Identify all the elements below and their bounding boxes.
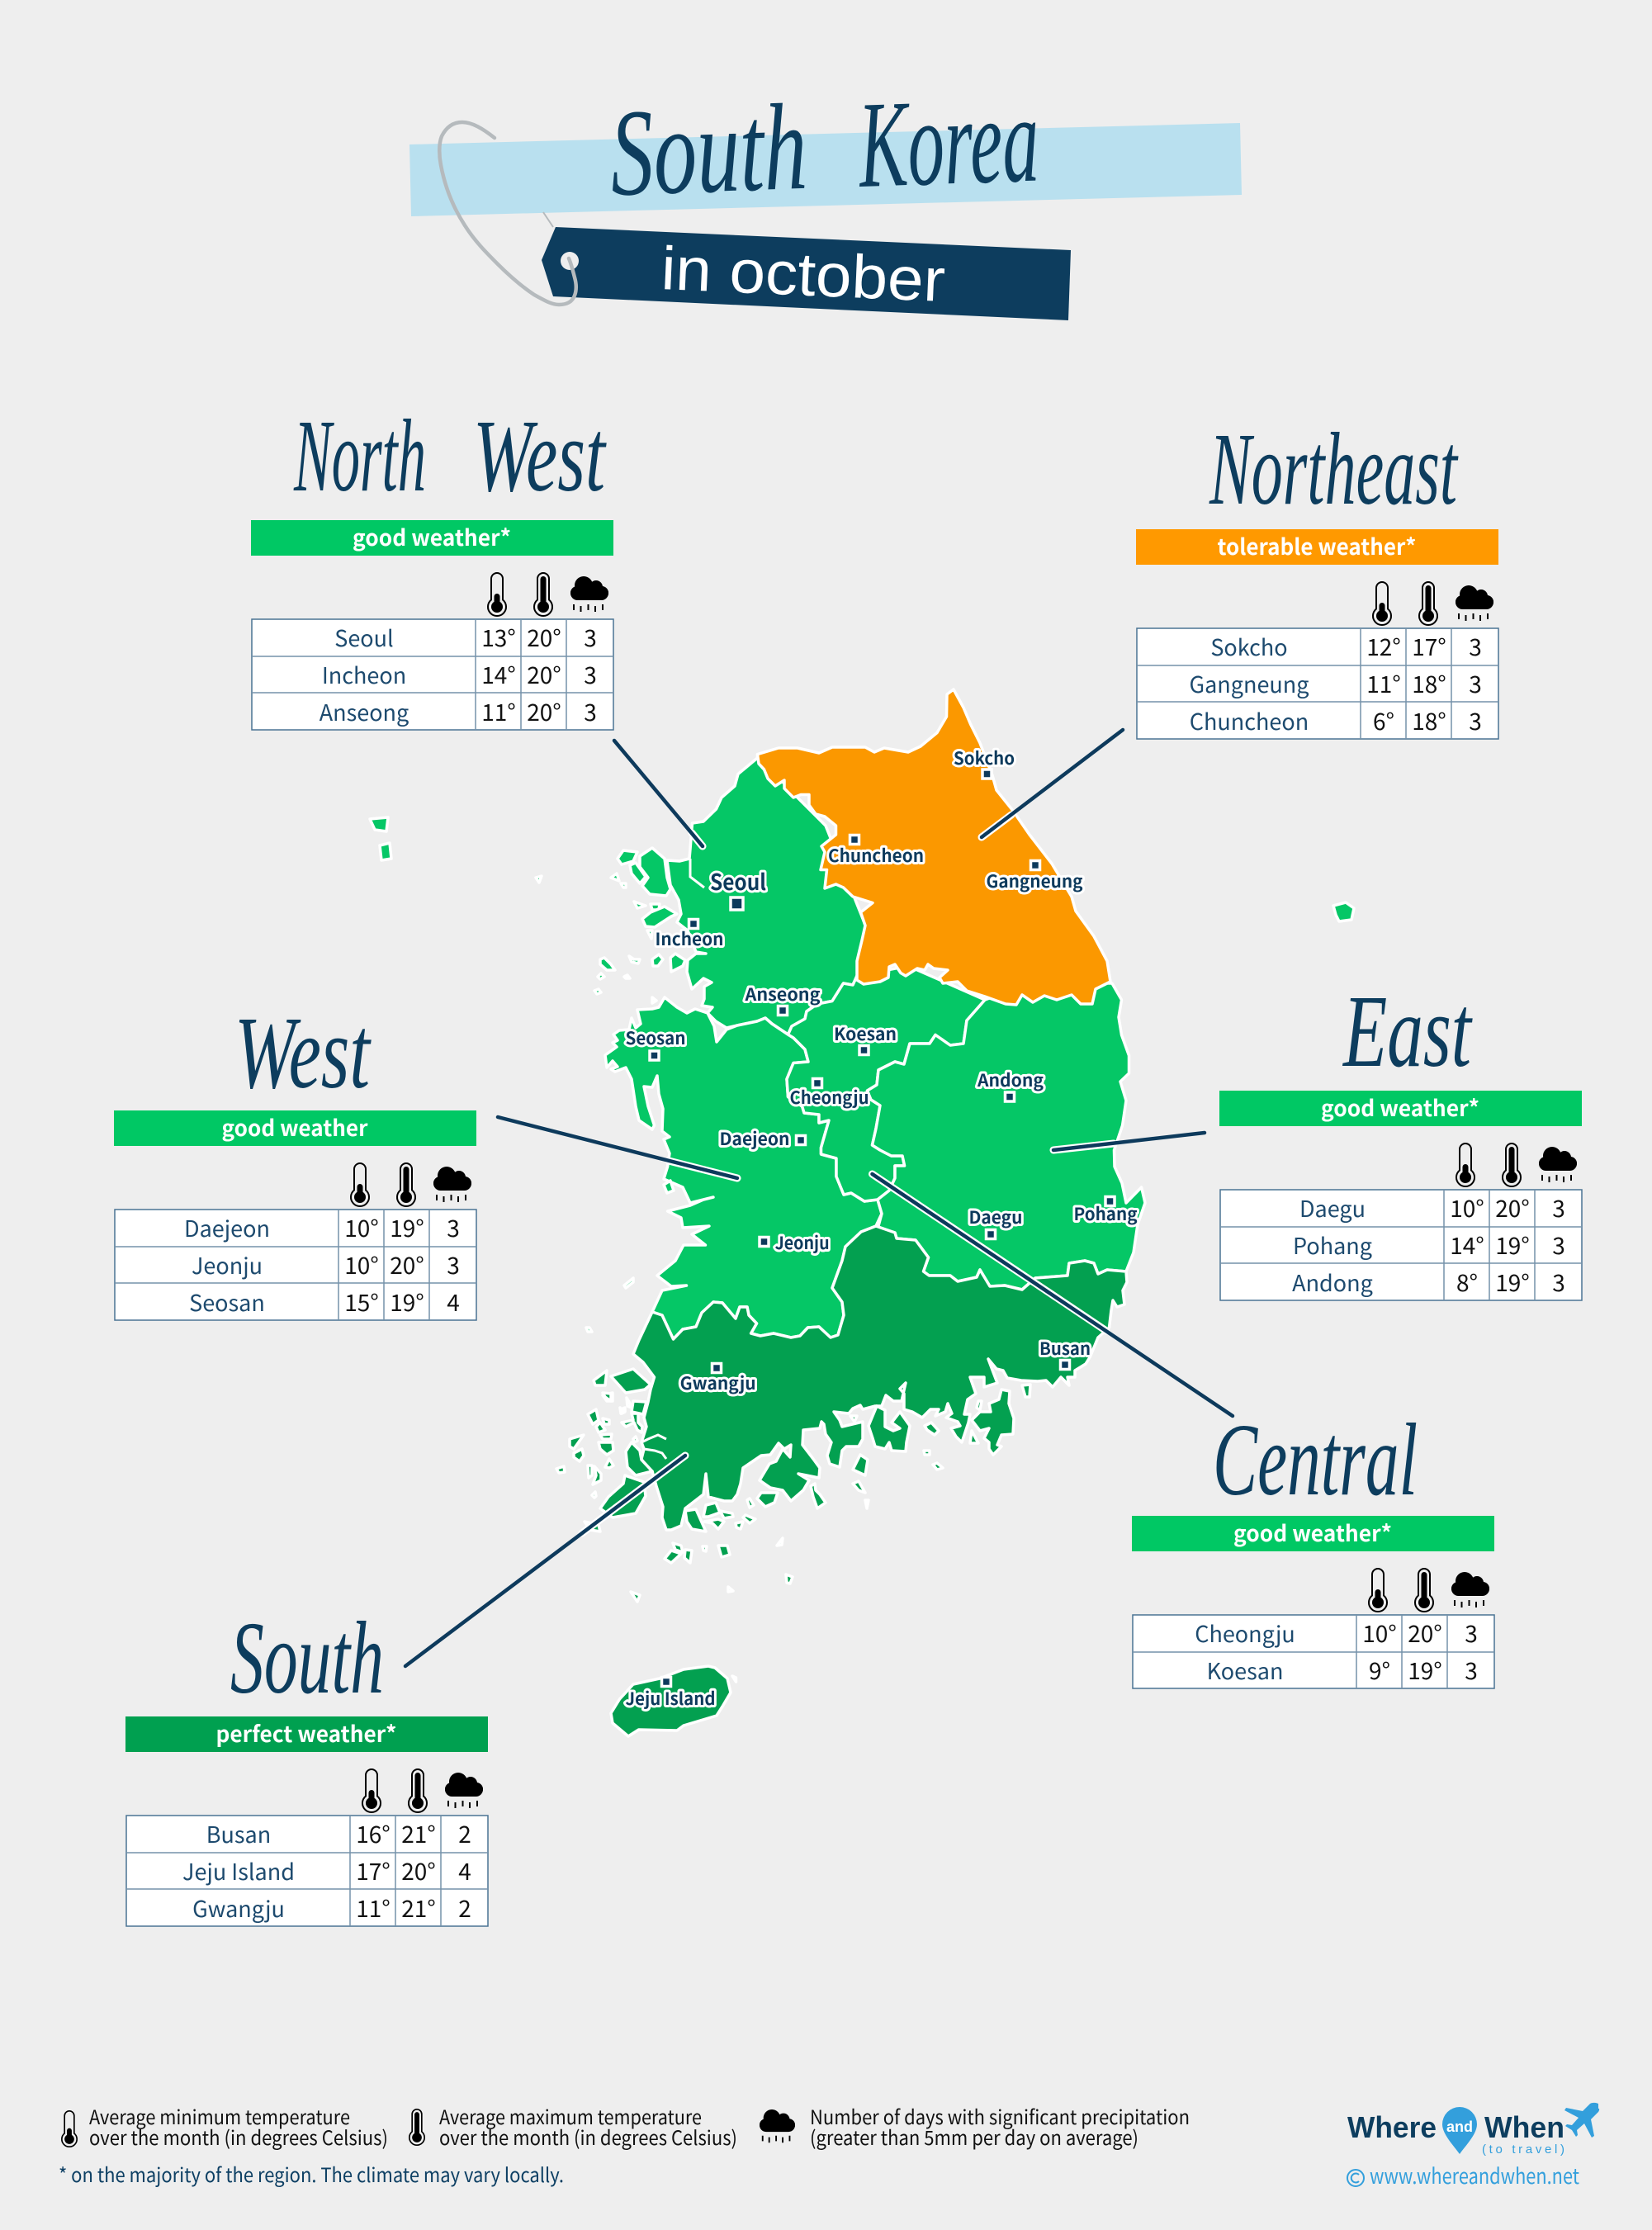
climate table: 3 (584, 658, 597, 691)
climate table: 11° (481, 695, 516, 728)
weather badge (125, 1716, 488, 1752)
weather badge (1132, 1516, 1494, 1551)
climate table: 3 (1469, 630, 1482, 663)
map of South Korea (370, 689, 1354, 1736)
icon: maximum temperature (1503, 1143, 1521, 1186)
climate table: 11° (356, 1891, 391, 1925)
city: Sokcho: Sokcho (954, 746, 1015, 770)
city: Koesan: Koesan (834, 1021, 897, 1046)
legend icon: maximum temperature (409, 2109, 424, 2145)
icon: rain (570, 576, 608, 612)
climate table: Seoul (334, 621, 394, 653)
website: www.whereandwhen.net (1370, 2160, 1579, 2190)
icon: rain (1539, 1147, 1577, 1182)
climate table: 3 (1552, 1229, 1565, 1262)
climate table: Daegu (1299, 1191, 1366, 1224)
climate table: 12° (1366, 630, 1401, 663)
climate table: 4 (447, 1285, 460, 1319)
icon: maximum temperature (1419, 582, 1437, 625)
climate table: 16° (356, 1817, 391, 1850)
heading: Northeast: Northeast (1209, 413, 1459, 527)
copyright symbol (1347, 2170, 1364, 2186)
city: Jeonju: Jeonju (775, 1230, 830, 1255)
climate table: 14° (1450, 1229, 1484, 1262)
leader: northeast (982, 730, 1123, 837)
climate table: 20° (390, 1248, 424, 1281)
climate table (1137, 628, 1498, 739)
subtitle: in october (660, 234, 947, 315)
icon: minimum temperature (362, 1769, 381, 1812)
main title (608, 70, 1041, 222)
icon: minimum temperature (1373, 582, 1391, 625)
climate table: Gwangju (192, 1891, 285, 1924)
icon: maximum temperature (397, 1163, 415, 1206)
city: Daejeon: Daejeon (720, 1126, 789, 1151)
climate table: 19° (1408, 1654, 1442, 1687)
legend text: precipitation: Number of days with significant precipitation (810, 2101, 1190, 2130)
climate table: 20° (1408, 1617, 1442, 1650)
title band (409, 123, 1242, 216)
icon: rain (1451, 1572, 1489, 1607)
climate table: Jeju Island (182, 1854, 295, 1887)
climate table: 10° (1362, 1617, 1397, 1650)
city: Seoul: Seoul (710, 864, 766, 897)
climate table (115, 1210, 476, 1320)
climate table: Pohang (1293, 1229, 1372, 1261)
heading: North West: North (293, 400, 426, 514)
legend (59, 2101, 1190, 2188)
city: Daegu: Daegu (969, 1205, 1022, 1229)
climate table: 6° (1373, 704, 1394, 737)
panel: Central (1132, 1404, 1494, 1688)
climate table: Incheon (322, 658, 406, 690)
logo word: Where: Where (1347, 2110, 1437, 2144)
city: Incheon: Incheon (656, 926, 723, 951)
climate table: 3 (1465, 1617, 1478, 1650)
icon: rain (445, 1773, 483, 1808)
icon: rain (433, 1167, 471, 1202)
climate table: 20° (527, 621, 561, 654)
city: Seoul (710, 864, 766, 910)
climate table: Busan (206, 1817, 271, 1849)
climate table (1133, 1615, 1494, 1688)
weather badge (1219, 1091, 1582, 1126)
map labels (626, 746, 1138, 1711)
weather badge (251, 520, 613, 556)
city: Busan: Busan (1039, 1336, 1091, 1361)
legend icon: minimum temperature (62, 2111, 77, 2147)
climate table: Daejeon (184, 1211, 270, 1243)
region: northeast (758, 689, 1110, 1005)
climate table: 20° (401, 1854, 436, 1887)
panel: North West (251, 400, 613, 730)
weather badge: good weather* (353, 520, 511, 552)
climate table: 19° (1495, 1266, 1530, 1299)
legend icon: rain (760, 2109, 795, 2142)
climate table: 14° (481, 658, 516, 691)
logo plane (1564, 2103, 1599, 2138)
panel: South (125, 1602, 488, 1926)
logo word: When: When (1484, 2110, 1564, 2144)
leader: north west (614, 741, 703, 846)
climate table: 3 (447, 1248, 460, 1281)
legend text: minimum temperature: over the month (in degrees Celsius) (89, 2122, 388, 2151)
climate table (126, 1816, 488, 1926)
islands: south coast (556, 1369, 1030, 1682)
main title: Korea (855, 70, 1041, 214)
climate table: 10° (344, 1211, 379, 1244)
city: Cheongju: Cheongju (789, 1085, 869, 1110)
heading: Central: Central (1213, 1404, 1418, 1517)
climate table: 18° (1412, 667, 1446, 700)
city: Anseong: Anseong (744, 982, 821, 1006)
leader: central (872, 1174, 1233, 1416)
region: west (605, 997, 882, 1339)
city: Gangneung: Gangneung (986, 869, 1083, 893)
heading: West: West (234, 997, 372, 1110)
inlets (641, 859, 704, 1459)
region: Jeju island (611, 1666, 731, 1736)
climate table: 20° (527, 695, 561, 728)
logo tagline: (to travel) (1482, 2142, 1564, 2157)
main title: South (608, 78, 809, 222)
weather badge: good weather (221, 1110, 368, 1143)
icon: maximum temperature (409, 1769, 427, 1812)
climate table: Andong (1292, 1266, 1373, 1298)
panel: East (1219, 975, 1582, 1300)
climate table: 3 (1552, 1266, 1565, 1299)
climate table: Anseong (320, 695, 409, 727)
panel: West (114, 997, 476, 1320)
weather badge: perfect weather* (216, 1716, 396, 1749)
logo (1347, 2103, 1599, 2190)
legend text: maximum temperature: Average maximum temperature (439, 2101, 702, 2130)
climate table: 20° (527, 658, 561, 691)
logo pin (1442, 2107, 1477, 2154)
city: Chuncheon: Chuncheon (828, 843, 924, 868)
city: Gwangju: Gwangju (680, 1371, 756, 1395)
climate table: 8° (1456, 1266, 1478, 1299)
heading: North West: West (473, 400, 607, 514)
climate table: 21° (401, 1891, 436, 1925)
legend text: maximum temperature: over the month (in degrees Celsius) (439, 2122, 737, 2151)
climate table: Seosan (189, 1285, 265, 1318)
leader halo (582, 815, 1114, 1533)
heading: South: South (230, 1602, 384, 1716)
leader: south (405, 1456, 685, 1666)
weather badge: good weather* (1321, 1091, 1479, 1123)
month tag (542, 227, 1071, 320)
icon: rain (1456, 585, 1493, 621)
weather badge: tolerable weather* (1217, 529, 1417, 561)
region: northwest (667, 755, 875, 1035)
climate table: 15° (344, 1285, 379, 1319)
climate table: 10° (344, 1248, 379, 1281)
tag hole (561, 252, 579, 270)
region: east (867, 982, 1145, 1290)
leader: west (498, 1117, 737, 1178)
climate table: 2 (458, 1891, 471, 1925)
climate table (1220, 1190, 1582, 1300)
climate table: 11° (1366, 667, 1401, 700)
climate table: 21° (401, 1817, 436, 1850)
leader lines (405, 730, 1233, 1666)
climate table: 10° (1450, 1191, 1484, 1224)
string (543, 212, 553, 227)
climate table: Sokcho (1210, 630, 1288, 662)
legend text: precipitation: (greater than 5mm per day on average) (810, 2122, 1138, 2151)
climate table: 9° (1369, 1654, 1390, 1687)
city: Jeju Island: Jeju Island (626, 1686, 715, 1711)
climate table: 3 (584, 621, 597, 654)
climate table: 3 (1465, 1654, 1478, 1687)
climate table: 19° (390, 1211, 424, 1244)
climate table: Cheongju (1195, 1617, 1295, 1649)
climate table: 3 (584, 695, 597, 728)
climate table: Gangneung (1189, 667, 1309, 699)
climate table: Chuncheon (1190, 704, 1309, 736)
climate table: 3 (1469, 667, 1482, 700)
leader: east (1053, 1133, 1205, 1150)
climate table: 2 (458, 1817, 471, 1850)
tag ring (439, 122, 576, 305)
weather badge (1136, 529, 1498, 565)
climate table: 20° (1495, 1191, 1530, 1224)
islands: northwest (370, 817, 1354, 1332)
icon: maximum temperature (534, 573, 552, 616)
climate table: Jeonju (192, 1248, 263, 1281)
icon: minimum temperature (1369, 1569, 1387, 1612)
legend text: minimum temperature: Average minimum temperature (89, 2101, 350, 2130)
climate table: 17° (356, 1854, 391, 1887)
climate table (252, 619, 613, 730)
icon: minimum temperature (351, 1163, 369, 1206)
footnote: * on the majority of the region. The climate may vary locally. (59, 2159, 564, 2188)
title block (409, 70, 1242, 320)
climate table: 17° (1412, 630, 1446, 663)
region: south (633, 1226, 1127, 1530)
region: central (787, 966, 985, 1201)
icon: minimum temperature (1456, 1143, 1474, 1186)
icon: minimum temperature (488, 573, 506, 616)
city: Seosan: Seosan (626, 1025, 685, 1050)
weather badge: good weather* (1233, 1516, 1392, 1548)
climate table: 13° (481, 621, 516, 654)
heading: East: East (1342, 975, 1473, 1089)
weather badge (114, 1110, 476, 1146)
climate table: 3 (447, 1211, 460, 1244)
city: Pohang: Pohang (1073, 1201, 1138, 1226)
climate table: 3 (1552, 1191, 1565, 1224)
climate table: 18° (1412, 704, 1446, 737)
climate table: 4 (458, 1854, 471, 1887)
climate table: 19° (1495, 1229, 1530, 1262)
logo word: and: and (1446, 2119, 1473, 2135)
city: Andong: Andong (977, 1068, 1044, 1092)
panel: Northeast (1136, 413, 1498, 739)
climate table: 3 (1469, 704, 1482, 737)
icon: maximum temperature (1415, 1569, 1433, 1612)
climate table: 19° (390, 1285, 424, 1319)
climate table: Koesan (1207, 1654, 1283, 1686)
